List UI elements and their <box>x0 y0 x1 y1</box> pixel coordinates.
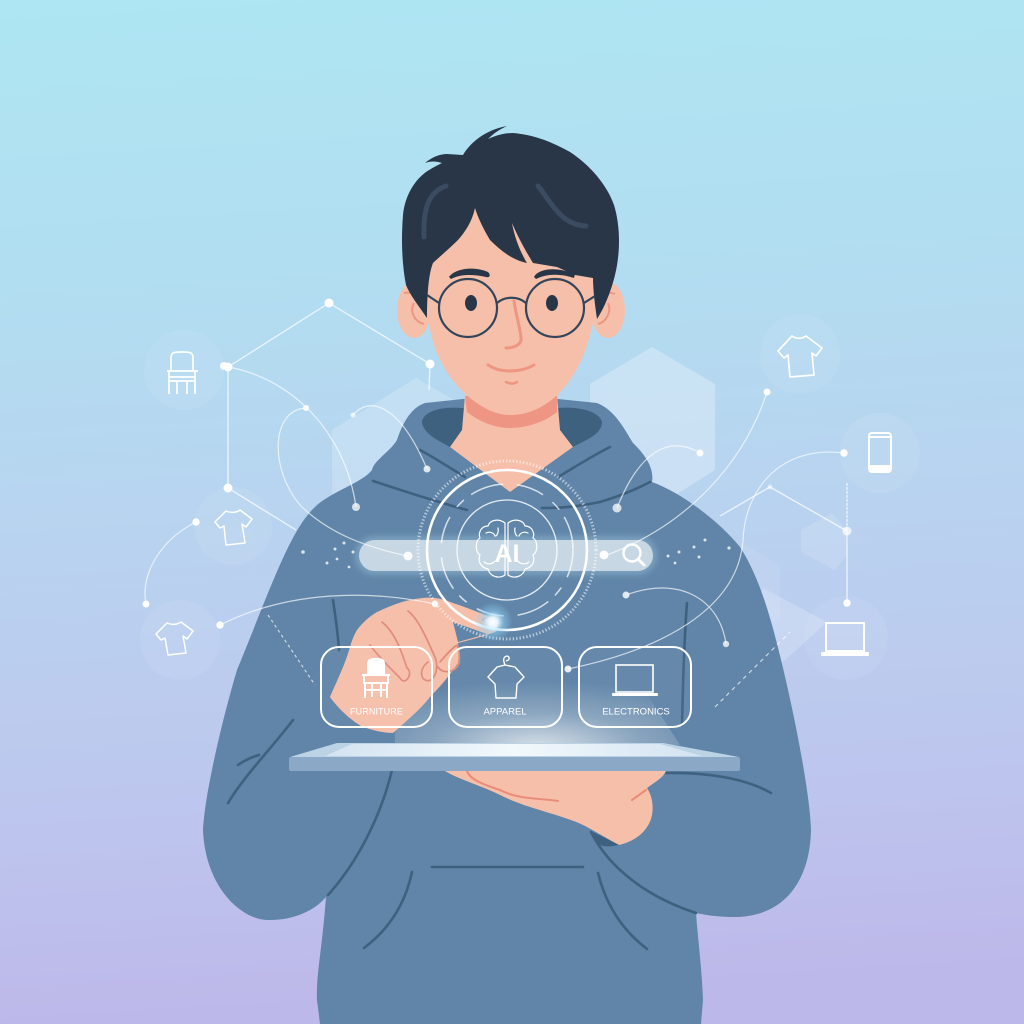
particle dots <box>301 538 731 568</box>
background hexagons <box>332 347 847 662</box>
neck shadow <box>465 396 557 428</box>
category card: furniture <box>321 647 432 727</box>
hair <box>402 126 619 319</box>
electronics icon <box>612 665 658 696</box>
fingertip spark <box>473 602 513 642</box>
hood interior <box>422 408 602 492</box>
tablet glow beam <box>394 660 680 745</box>
category card: apparel <box>449 647 562 727</box>
icon: t-shirt upper right <box>778 336 822 377</box>
ears <box>397 282 625 338</box>
tablet <box>289 743 740 771</box>
AI search interface <box>355 461 657 639</box>
hoodie body and sleeves <box>203 399 811 1024</box>
icon: smartphone <box>869 433 891 472</box>
finger creases <box>370 611 495 681</box>
network nodes <box>142 298 852 672</box>
brain icon <box>476 520 537 577</box>
eyes <box>465 295 558 311</box>
face <box>428 190 596 415</box>
icon: armchair <box>167 352 198 394</box>
eyebrows <box>449 269 575 279</box>
electronics label: ELECTRONICS <box>602 706 670 718</box>
AI rings <box>418 461 596 639</box>
supporting hand <box>445 771 666 846</box>
nose <box>506 301 521 348</box>
AI label: AI <box>494 540 520 568</box>
bar glow <box>355 536 657 575</box>
network curves over the figure <box>145 367 844 707</box>
mouth <box>488 365 534 384</box>
network lines behind the figure <box>228 303 847 603</box>
furniture icon <box>362 658 390 698</box>
apparel icon <box>488 656 524 698</box>
pointing hand <box>330 598 497 733</box>
person <box>203 126 811 1024</box>
icon: t-shirt lower left <box>156 622 193 655</box>
icon: laptop <box>821 623 869 656</box>
furniture label: FURNITURE <box>350 706 403 716</box>
icon halos <box>140 314 920 680</box>
apparel label: APPAREL <box>483 706 527 718</box>
icon: t-shirt left <box>215 510 252 545</box>
search bar <box>359 540 653 571</box>
gap between finger and thumb <box>453 622 487 642</box>
category card: electronics <box>579 647 691 727</box>
glasses <box>427 279 595 337</box>
hoodie fold lines <box>228 447 771 949</box>
neck <box>450 395 573 492</box>
search icon <box>624 544 644 565</box>
